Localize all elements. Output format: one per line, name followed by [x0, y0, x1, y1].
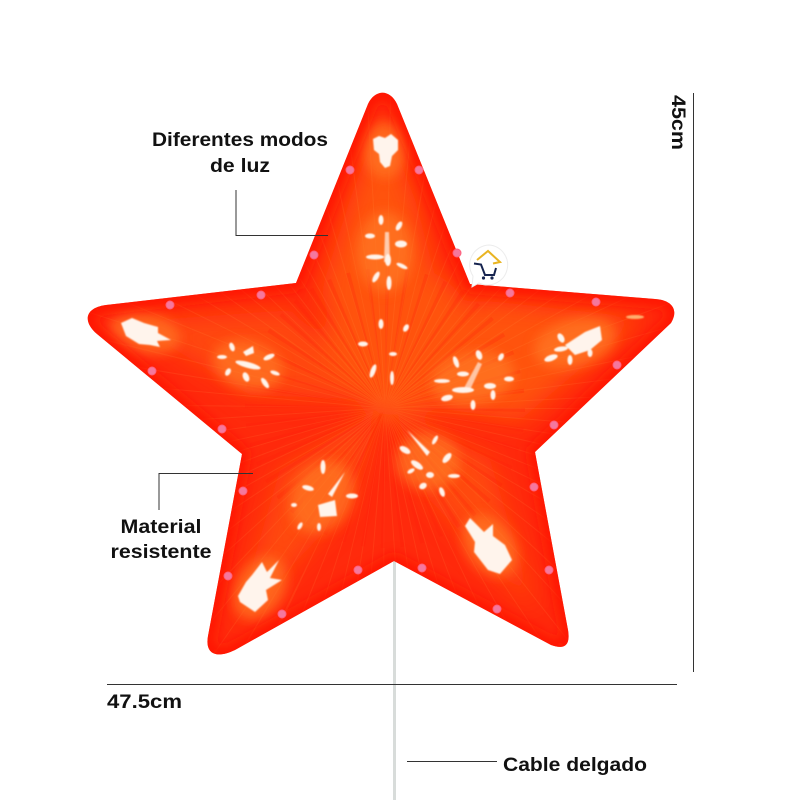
icon: shop logo bubble	[470, 245, 508, 287]
light: bottom left	[238, 560, 282, 612]
label: thin cable: Cable delgado	[503, 755, 647, 776]
light: right outer	[543, 315, 644, 365]
lights: white sparkles	[121, 134, 644, 612]
light halos	[106, 122, 622, 629]
mounting dots	[148, 166, 621, 618]
height label: 45cm	[667, 95, 688, 150]
star lamp	[88, 93, 674, 654]
arm glow	[162, 146, 636, 597]
light: far left	[121, 318, 171, 347]
light: bottom right	[465, 518, 512, 574]
light: upper	[365, 215, 408, 290]
width dimension line	[107, 684, 677, 686]
light: top	[373, 134, 398, 168]
label: light modes: Diferentes modos	[152, 130, 328, 151]
light: lower left	[291, 460, 358, 531]
light: lower right	[398, 430, 460, 498]
height dimension line	[692, 93, 694, 672]
label: resistant material	[110, 517, 212, 563]
cable	[393, 560, 396, 800]
leader line: cable	[407, 760, 497, 762]
leader line: light modes	[236, 190, 328, 236]
light: left inner	[217, 342, 280, 389]
width label: 47.5cm	[107, 692, 182, 713]
label: light modes	[152, 130, 328, 177]
label: resistant material: resistente	[110, 542, 212, 563]
light: centre	[358, 319, 410, 385]
red rim	[88, 93, 674, 654]
label: resistant material: Material	[120, 517, 202, 538]
light: right inner	[434, 349, 514, 410]
leader line: resistant material	[159, 474, 253, 510]
label: light modes: de luz	[210, 156, 270, 177]
radial ridges	[225, 248, 545, 568]
